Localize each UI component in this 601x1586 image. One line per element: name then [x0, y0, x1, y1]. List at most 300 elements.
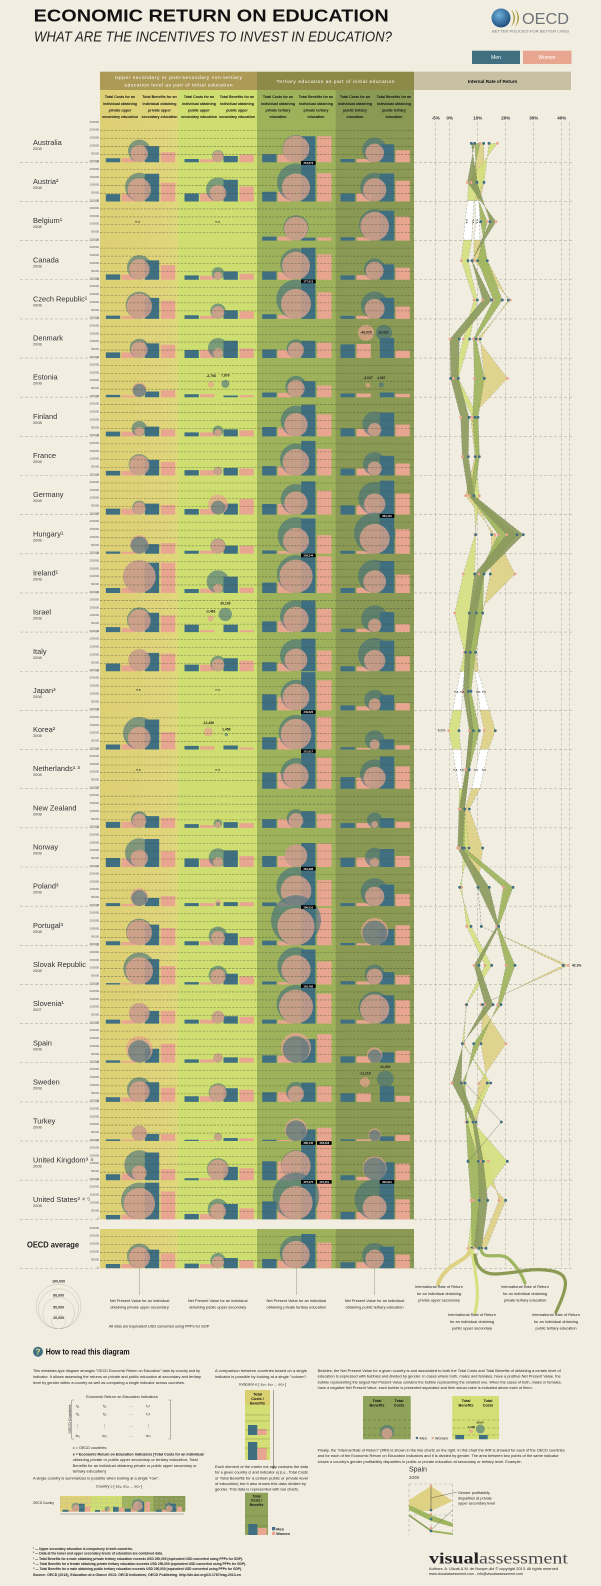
row: OECD average [90, 1226, 414, 1269]
label: Denmark: 2008 [33, 342, 42, 347]
IRR callouts and n.a. labels: n.a. [460, 769, 465, 772]
row: Hungary: 150000 [90, 527, 99, 531]
label: France: 2008 [33, 459, 42, 464]
root labels: International Rate of Return [415, 1284, 463, 1289]
row: Poland: 150000 [90, 879, 99, 883]
text block: intro: level by gender within a country as well as comparing a single indicator across countries. [33, 1381, 185, 1385]
column headings: individual obtaining [103, 102, 137, 106]
label: Germany: Germany [33, 490, 64, 499]
label: Korea: 2008 [33, 733, 42, 738]
matrix diagram: Economic Return on Education Indicators [86, 1394, 158, 1399]
mini chart: bars by gender: Men [276, 1527, 285, 1531]
n.a. labels: Belgium: n.a. [215, 220, 221, 224]
row: Netherlands: 150000 [90, 762, 99, 766]
row: Israel: 0 [97, 629, 99, 633]
row: United Kingdom: 200000 [90, 1146, 99, 1150]
value label: Czech Republic: 277,013 [304, 280, 314, 284]
bars: Germany [113, 481, 403, 515]
root labels: International Rate of Return [501, 1284, 549, 1289]
row: Austria: 0 [97, 198, 99, 202]
bubbles: Korea [123, 715, 384, 750]
label: Finland [33, 412, 57, 425]
row: Estonia: 100000 [90, 378, 99, 382]
row: Slovak Republic: 0 [97, 981, 99, 985]
row: OECD average: 50000 [91, 1257, 99, 1261]
bubbles: OECD average [127, 1236, 387, 1268]
mini chart: bars by gender: Benefits [250, 1503, 263, 1507]
connectors and net present value captions: Net Present Value for an individual [345, 1298, 404, 1303]
row: Turkey: 150000 [90, 1114, 99, 1118]
label: Spain: 2008 [33, 1046, 42, 1051]
text block: matrix legend: obtaining private or public upper secondary or tertiary education; Total [73, 1458, 198, 1462]
bubbles: Netherlands [281, 758, 389, 789]
legend: men women dots [416, 1436, 448, 1440]
row: United States [90, 1173, 414, 1220]
n.a. labels: Japan [136, 688, 221, 692]
label: Turkey: 2008 [33, 1125, 42, 1130]
IRR axis labels and grid: 20% [501, 116, 510, 120]
label: Japan [33, 686, 56, 699]
row: United Kingdom: 0 [97, 1177, 99, 1181]
row: Italy: 250000 [90, 629, 99, 633]
row: OECD average: 0 [97, 1265, 99, 1269]
IRR callouts and n.a. labels: n.a. [476, 690, 481, 693]
IRR callouts and n.a. labels: n.a. [453, 769, 458, 772]
band: public upper secondary [449, 143, 507, 1248]
label: Slovak Republic: 2008 [33, 968, 42, 973]
label: New Zealand: 2008 [33, 811, 42, 816]
OECD logo: BETTER POLICIES FOR BETTER LIVES [492, 29, 570, 33]
row: Netherlands: 50000 [91, 778, 99, 782]
value labels: United Kingdom [301, 1141, 332, 1145]
callout: gender disparities: Gender profitability [458, 1491, 490, 1495]
row: Slovenia: 150000 [90, 997, 99, 1001]
text block: column reading [215, 1369, 307, 1386]
label: Denmark: Denmark [33, 334, 63, 343]
label: Norway: Norway [33, 842, 58, 852]
row: Spain: 100000 [90, 1044, 99, 1048]
bars: Denmark [113, 338, 403, 358]
row: Poland: 200000 [90, 871, 99, 875]
value label: Slovenia [301, 984, 316, 988]
mini chart: one indicator column: Benefits [250, 1402, 265, 1406]
mini chart: one indicator column: Total [253, 1392, 262, 1396]
label: Slovak Republic: Slovak Republic [33, 960, 86, 969]
text block: column reading: A comparison between countries based on a single [215, 1369, 307, 1373]
mini chart: bars by gender: Total [252, 1494, 261, 1498]
row: Germany: 0 [97, 512, 99, 516]
value label: Poland [301, 867, 316, 871]
label: Poland: 2008 [33, 890, 42, 895]
callout: gender disparities [458, 1491, 495, 1506]
bubble values: Israel [206, 601, 231, 613]
mini chart: negative bubbles: -1,998 [467, 1425, 475, 1429]
label: Estonia: 2008 [33, 381, 42, 386]
label: Belgium: Belgium¹ [33, 216, 63, 225]
bubble size legend: 80,000 [53, 1294, 64, 1298]
label: Slovenia: 2007 [33, 1007, 42, 1012]
column headings: secondary education [219, 115, 255, 119]
heading: how to read: How to read this diagram [46, 1348, 130, 1356]
bubble values: Sweden: -11,218 [359, 1072, 371, 1076]
label: Germany [33, 490, 64, 503]
row: Korea [90, 707, 414, 751]
bubbles: Slovenia [129, 985, 391, 1024]
footnotes: ² — Data at the lower and upper secondary levels of education are combined data. [33, 1552, 163, 1556]
legend: men and women [472, 51, 572, 64]
row: Belgium: 0 [97, 238, 99, 242]
n.a. labels: Japan: n.a. [215, 688, 221, 692]
bubbles: Turkey [132, 1118, 381, 1141]
row: Netherlands: 100000 [90, 770, 99, 774]
text block: internal rate of return explanation: and for each of the Economic Return on Education Indicators and it is divided by gender. The area between two points of the same indicator [318, 1454, 559, 1458]
matrix diagram: ⋮ [103, 1423, 107, 1428]
legend: men and women: Women [538, 55, 556, 61]
row: Estonia: 250000 [90, 355, 99, 359]
row: United States: 100000 [90, 1200, 99, 1204]
row: Turkey: 100000 [90, 1122, 99, 1126]
header: tertiary [257, 72, 414, 90]
bars: Estonia [113, 381, 403, 397]
row: Denmark: 200000 [90, 323, 99, 327]
IRR callouts and n.a. labels: n.a. [482, 769, 487, 772]
row: Turkey: 50000 [91, 1130, 99, 1134]
bars: Korea [113, 714, 403, 750]
label: Canada: 2008 [33, 263, 42, 268]
n.a. labels: Belgium: n.a. [135, 220, 141, 224]
bubbles: Poland [130, 867, 389, 906]
row: New Zealand: 200000 [90, 793, 99, 797]
root labels: public upper secondary [452, 1326, 492, 1330]
value labels: United States: 375,275 [304, 1180, 314, 1184]
label: United States [33, 1195, 90, 1208]
row: Hungary: 100000 [90, 535, 99, 539]
row: Norway: 0 [97, 864, 99, 868]
row: Slovak Republic: 200000 [90, 950, 99, 954]
connectors and net present value captions: obtaining private tertiary education [267, 1305, 326, 1310]
row: Ireland [90, 551, 414, 594]
value labels: United States: 252,914 [382, 1180, 392, 1184]
row: Ireland: 0 [97, 590, 99, 594]
row: United Kingdom: 100000 [90, 1161, 99, 1165]
mini chart: bars by gender [245, 1493, 291, 1536]
row: Australia: 0 [97, 159, 99, 163]
header: tertiary: Tertiary education as part of initial education [276, 79, 395, 85]
bubbles: Israel [127, 600, 388, 632]
row: Portugal: 250000 [90, 903, 99, 907]
row: Israel: 200000 [90, 597, 99, 601]
text block: net present value explanation: Besides, the Net Present Value for a given country is and associated to both the Total Costs and Total Benefits of obtaining a certain level of [318, 1369, 562, 1373]
row: Sweden: 50000 [91, 1091, 99, 1095]
n.a. labels: Netherlands [136, 768, 221, 772]
bars: Poland [113, 868, 403, 906]
mini chart: positive bubbles: Costs [394, 1404, 404, 1408]
row: Slovak Republic: 150000 [90, 958, 99, 962]
row: Germany: 150000 [90, 488, 99, 492]
column headings: Total Costs for an [184, 95, 214, 99]
bars: Hungary [113, 516, 403, 554]
connectors and net present value captions [110, 1268, 404, 1310]
label: United States: 2008 [33, 1203, 42, 1208]
bars: Japan [269, 672, 403, 710]
row: Denmark [90, 316, 414, 359]
footnotes: ¹ — Upper secondary education is compulsory in both countries. [33, 1547, 133, 1551]
matrix diagram: ⋮ [76, 1423, 80, 1428]
row: Denmark: 100000 [90, 339, 99, 343]
text block: element of matrix: gender. This data is represented with bar charts. [215, 1488, 299, 1492]
row: United Kingdom: 150000 [90, 1154, 99, 1158]
matrix diagram: i₁₂ [103, 1403, 107, 1408]
row: Canada [90, 237, 414, 281]
label: Australia: Australia [33, 138, 63, 147]
row: Korea: 0 [97, 747, 99, 751]
bubbles: Sweden [127, 1071, 394, 1102]
row: Estonia: 200000 [90, 363, 99, 367]
row: Japan [90, 668, 414, 711]
label: Norway: 2008 [33, 850, 42, 856]
row: Spain [90, 1020, 414, 1064]
row: Norway [90, 825, 414, 868]
label: Canada [33, 255, 60, 268]
IRR callouts and n.a. labels: n.a. [454, 690, 459, 693]
footnotes: ⁴ — Total Benefits for a female obtaining private tertiary education exceeds USD 250,000 (equivalent USD converted using PPPs for GDP). [33, 1562, 246, 1566]
text block: internal rate of return explanation [318, 1448, 565, 1464]
matrix diagram: i₂₂ [103, 1411, 107, 1416]
row: Korea: 50000 [91, 739, 99, 743]
mini chart: bars by gender: Costs / [251, 1499, 262, 1503]
text block: internal rate of return explanation: Finally, the "Internal Rate of Return" (IRR) is shown in the line charts on the right. In this chart the IRR is showed for each of the OECD countries [318, 1448, 565, 1452]
column headings: education [308, 115, 324, 119]
row: Austria: 200000 [90, 167, 99, 171]
row: Finland: 50000 [91, 425, 99, 429]
example heading: Spain: Spain [409, 1467, 427, 1474]
column headings: secondary education [181, 115, 217, 119]
row: Japan: 200000 [90, 676, 99, 680]
matrix diagram: ... [129, 1403, 133, 1408]
IRR axis labels and grid [20, 116, 573, 1268]
mini chart: one country row [33, 1496, 185, 1514]
column headings: individual obtaining [143, 102, 176, 106]
credit: visualassessment: www.visualassessment.com - info@visualassessment.com [429, 1572, 523, 1576]
matrix diagram: i₁₁ [76, 1403, 80, 1408]
row: Canada: 200000 [90, 245, 99, 249]
column headings: public upper [226, 108, 248, 112]
bars: France [113, 441, 403, 476]
band: private upper secondary [465, 143, 568, 1248]
label: Hungary: 2008 [33, 537, 42, 542]
row: OECD average: 150000 [90, 1242, 99, 1246]
credit: visualassessment: Authors: A. Ulicaš & M. de Nooyer-did © copyright 2013. All rights reserved [429, 1567, 558, 1571]
bubbles: Spain [126, 1033, 382, 1063]
row: Belgium [90, 198, 414, 242]
matrix diagram: i₁ₙ [146, 1403, 151, 1408]
row: Estonia: 0 [97, 394, 99, 398]
row: Slovenia: 200000 [90, 989, 99, 993]
column headings: individual obtaining [261, 102, 295, 106]
row: Norway: 250000 [90, 825, 99, 829]
label: Japan: Japan³ [33, 686, 56, 695]
column headings: private tertiary [304, 108, 328, 112]
bubbles: Australia [128, 135, 387, 162]
row: Canada: 100000 [90, 261, 99, 265]
row: Finland: 200000 [90, 402, 99, 406]
bubble size legend: 10,000 [53, 1316, 64, 1320]
text block: row reading [33, 1476, 159, 1488]
row: Denmark: 0 [97, 355, 99, 359]
row: Turkey: 250000 [90, 1099, 99, 1103]
matrix diagram: OECD Countries [67, 1404, 72, 1433]
row: OECD average: 200000 [90, 1234, 99, 1238]
label: Australia [33, 138, 63, 151]
label: Netherlands [33, 764, 80, 777]
OECD logo: OECD [522, 11, 569, 28]
bubbles: Germany [132, 482, 391, 515]
label: Australia: 2008 [33, 146, 42, 151]
row: Italy: 0 [97, 668, 99, 672]
label: Finland: Finland [33, 412, 57, 421]
value label: Austria: 254,673 [304, 161, 314, 165]
title: ECONOMIC RETURN ON EDUCATION [34, 5, 389, 25]
matrix diagram: i₂₁ [76, 1411, 80, 1416]
bubbles: Finland [132, 406, 387, 436]
mini chart: negative bubbles: Benefits [459, 1404, 473, 1408]
row: Portugal: 0 [97, 942, 99, 946]
row: France: 150000 [90, 449, 99, 453]
label: Germany: 2008 [33, 498, 42, 503]
mini chart: positive bubbles [363, 1396, 411, 1439]
bars: United States [113, 1183, 403, 1219]
icon: question mark [33, 1347, 43, 1357]
text block: matrix legend: e = Economic Return on Education Indicators [Total Costs for an individual [73, 1452, 204, 1456]
row: New Zealand: 0 [97, 825, 99, 829]
connectors and net present value captions: Net Present Value for an individual [188, 1298, 248, 1303]
bubbles: Austria [125, 163, 389, 201]
row: France: 0 [97, 473, 99, 477]
row: Spain: 50000 [91, 1052, 99, 1056]
white n.a. bands [453, 201, 489, 788]
row: Sweden: 250000 [90, 1060, 99, 1064]
row: Austria: 50000 [91, 190, 99, 194]
bubble values: Estonia: -2,798 [206, 374, 216, 378]
label: Czech Republic [33, 294, 88, 307]
row: Norway: 50000 [91, 856, 99, 860]
row: Israel [90, 590, 414, 633]
bars: Norway [113, 839, 403, 867]
row: Spain: 250000 [90, 1020, 99, 1024]
label: Finland: 2008 [33, 420, 42, 425]
matrix diagram: ... [129, 1411, 133, 1416]
value label: Ireland [301, 554, 316, 558]
connectors and net present value captions: Net Present Value for an individual [110, 1298, 169, 1303]
row: Korea: 200000 [90, 715, 99, 719]
bubble size legend [36, 1280, 81, 1329]
text block: matrix legend: tertiary education] [73, 1470, 106, 1474]
row: Austria: 250000 [90, 159, 99, 163]
value labels: United Kingdom: 253,218 [320, 1141, 330, 1145]
text block: column reading: Indicator e [ e₁ₙ, e₂ₙ ... ecₙ ] [239, 1382, 286, 1386]
legend: men and women: Men [491, 55, 501, 61]
row: United States: 0 [97, 1216, 99, 1220]
bubble values: Denmark: 28,420 [378, 331, 389, 335]
row: Canada: 0 [97, 277, 99, 281]
row: Netherlands: 200000 [90, 754, 99, 758]
label: United Kingdom: 2008 [33, 1164, 42, 1169]
example heading: Spain: 2008 [409, 1475, 420, 1480]
bubble size legend: 100,000 [52, 1280, 65, 1284]
label: Ireland: 2008 [33, 576, 42, 581]
root labels: for an individual obtaining [450, 1319, 494, 1324]
text block: net present value explanation: education is expressed with bubbles and divided by gender. In cases where both, males and females, have a positive Net Present Value, the [318, 1375, 561, 1379]
row: New Zealand [90, 786, 414, 829]
bubble values: Denmark [360, 331, 389, 335]
text block: column reading: indicator is possible by looking at a single "column": [215, 1375, 307, 1379]
label: Korea: Korea² [33, 725, 56, 734]
footnotes [33, 1547, 246, 1577]
row: Czech Republic: 50000 [91, 308, 99, 312]
bubble values: Korea: -12,456 [203, 721, 214, 725]
bubble values: Israel: 39,199 [220, 601, 231, 605]
bars: Netherlands [269, 753, 403, 789]
text block: internal rate of return explanation: shows a country's gender profitability disparities in public or private education at secondary or tertiary level. Example: [318, 1460, 522, 1464]
n.a. labels: Belgium [135, 220, 221, 224]
label: Estonia [33, 373, 59, 386]
row: Netherlands: 0 [97, 786, 99, 790]
column headings [102, 95, 411, 119]
row: Poland [90, 864, 414, 907]
column headings: Total Costs for an [105, 95, 135, 99]
bubble values: Estonia: 7,876 [221, 374, 230, 378]
bars: Sweden [113, 1082, 403, 1102]
row: Austria: 100000 [90, 182, 99, 186]
label: Austria [33, 177, 59, 190]
label: France: France [33, 451, 56, 460]
row: New Zealand: 150000 [90, 801, 99, 805]
mini chart: negative bubbles: Total [462, 1399, 470, 1403]
column headings: Total Benefits for an [377, 95, 411, 99]
label: Israel [33, 608, 51, 621]
mini chart: one indicator column: Costs / [251, 1397, 265, 1401]
row: Ireland: 250000 [90, 551, 99, 555]
row: Portugal: 150000 [90, 919, 99, 923]
bubble values: Korea: 1,456 [222, 728, 231, 732]
bubbles: Italy [128, 638, 391, 671]
label: Korea [33, 725, 56, 738]
root labels [415, 1284, 580, 1330]
row: Spain: 150000 [90, 1036, 99, 1040]
root labels: International Rate of Return [532, 1312, 580, 1317]
label: Sweden [33, 1077, 60, 1090]
bubbles: Slovak Republic [123, 947, 385, 984]
row: Portugal: 100000 [90, 926, 99, 930]
row: Portugal: 200000 [90, 911, 99, 915]
bubbles: Portugal [126, 895, 388, 945]
text block: intro [33, 1369, 201, 1385]
row: Czech Republic: 150000 [90, 292, 99, 296]
row: Korea: 150000 [90, 723, 99, 727]
row: Japan: 250000 [90, 668, 99, 672]
row: Slovak Republic: 50000 [91, 973, 99, 977]
value label: Netherlands [301, 749, 316, 753]
IRR axis labels and grid: 0% [446, 116, 453, 120]
row: Slovenia: 0 [97, 1021, 99, 1025]
markers: women [449, 143, 568, 1248]
row: Italy: 100000 [90, 652, 99, 656]
label: Slovak Republic [33, 960, 86, 973]
column headings: individual obtaining [220, 102, 254, 106]
value label: Czech Republic [301, 280, 316, 284]
row: Poland: 50000 [91, 895, 99, 899]
row: Germany: 250000 [90, 472, 99, 476]
